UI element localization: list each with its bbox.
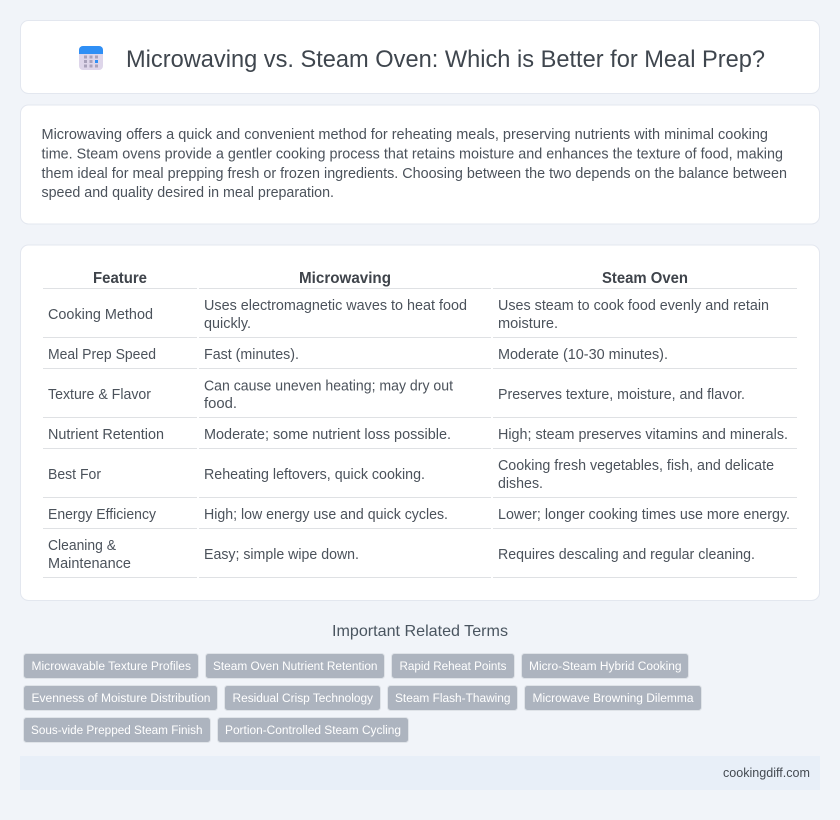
tag [524,686,702,710]
tag: Micro-Steam Hybrid Cooking [529,659,682,673]
text block: introduction: time. Steam ovens provide a gentler cooking process that retains moisture and enhances the texture of food, making [42,146,783,162]
panel: introduction [20,105,820,224]
row: energy efficiency: Energy Efficiency [48,507,157,523]
tag [388,686,518,710]
tag: Residual Crisp Technology [232,691,374,705]
row: best for: Best For [48,467,101,483]
tag: Microwavable Texture Profiles [32,659,191,673]
tag [224,686,380,710]
row: best for [48,458,774,492]
row: texture and flavor: Texture & Flavor [48,387,151,403]
row: cleaning and maintenance: Requires descaling and regular cleaning. [498,547,755,563]
row: cooking method: Uses electromagnetic waves to heat food [204,298,467,314]
table header: Feature [93,270,147,287]
row: best for: dishes. [498,476,543,492]
related term tags [24,654,702,742]
row: meal prep speed [48,347,668,363]
row: meal prep speed: Moderate (10-30 minutes). [498,347,668,363]
row: nutrient retention [48,427,788,443]
table header: Steam Oven [602,270,688,287]
row: nutrient retention: Nutrient Retention [48,427,164,443]
tag [522,654,688,678]
footer [20,756,820,790]
row: cooking method: Uses steam to cook food evenly and retain [498,298,769,314]
tag [392,654,514,678]
row: texture and flavor [48,378,745,412]
tag [24,654,198,678]
row: energy efficiency: High; low energy use and quick cycles. [204,507,448,523]
tag: Sous-vide Prepped Steam Finish [31,723,202,737]
heading: important related terms: Important Related Terms [332,623,508,640]
tag: Rapid Reheat Points [400,659,506,673]
row: texture and flavor: Preserves texture, moisture, and flavor. [498,387,745,403]
tag: Microwave Browning Dilemma [532,691,694,705]
row: meal prep speed: Meal Prep Speed [48,347,156,363]
tag: Steam Oven Nutrient Retention [213,659,378,673]
row: best for: Cooking fresh vegetables, fish, and delicate [498,458,774,474]
row: meal prep speed: Fast (minutes). [204,347,299,363]
row: cleaning and maintenance [48,538,755,572]
row: nutrient retention: Moderate; some nutrient loss possible. [204,427,451,443]
row: energy efficiency: Lower; longer cooking times use more energy. [498,507,790,523]
panel: comparison table [20,245,820,600]
row: cooking method [48,298,769,332]
row: cleaning and maintenance: Easy; simple wipe down. [204,547,359,563]
title: Microwaving vs. Steam Oven: Which is Better for Meal Prep? [126,46,765,73]
tag: Steam Flash-Thawing [395,691,510,705]
tag [24,718,210,742]
text block: introduction [42,127,787,201]
row: cooking method: moisture. [498,316,558,332]
text block: introduction: them ideal for meal prepping fresh or frozen ingredients. Choosing between the two depends on the balance between [42,166,787,182]
row: energy efficiency [48,507,790,523]
row: best for: Reheating leftovers, quick cooking. [204,467,425,483]
row: texture and flavor: food. [204,396,237,412]
row: cleaning and maintenance: Cleaning & [48,538,116,554]
row: cooking method: quickly. [204,316,251,332]
tag: Portion-Controlled Steam Cycling [225,723,401,737]
tag [24,686,218,710]
panel: header [20,20,820,94]
table header [93,270,688,287]
row: cleaning and maintenance: Maintenance [48,556,131,572]
icon: calendar [79,46,103,70]
tag [218,718,408,742]
text block: introduction: speed and quality desired in meal preparation. [42,185,334,201]
row: cooking method: Cooking Method [48,307,153,323]
row: nutrient retention: High; steam preserves vitamins and minerals. [498,427,788,443]
footer source text: cookingdiff.com [723,766,810,780]
tag: Evenness of Moisture Distribution [32,691,210,705]
row: texture and flavor: Can cause uneven heating; may dry out [204,378,453,394]
text block: introduction: Microwaving offers a quick and convenient method for reheating meals, preserving nutrients with minimal cooking [42,127,768,143]
tag [206,654,384,678]
table header: Microwaving [299,270,391,287]
